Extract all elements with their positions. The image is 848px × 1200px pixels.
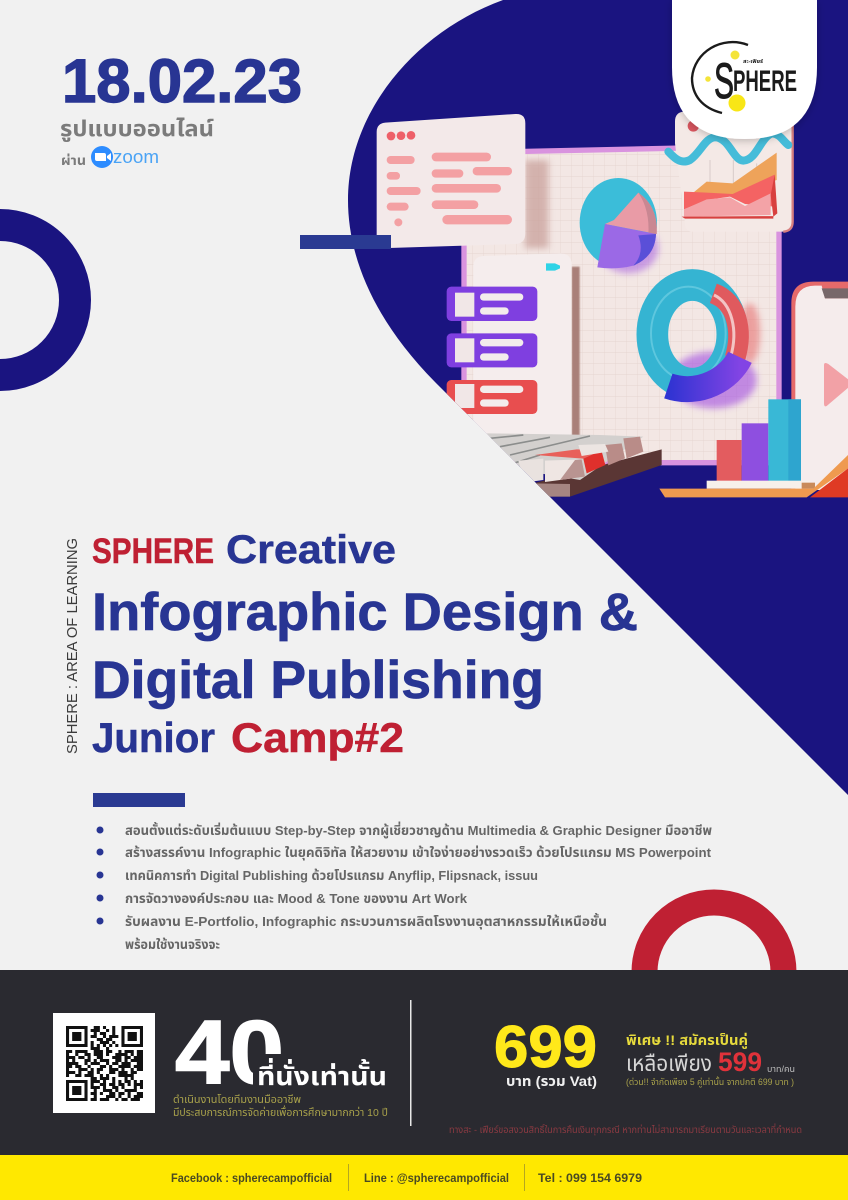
via: ผ่าน xyxy=(61,153,86,168)
footer contacts xyxy=(171,1164,642,1191)
bullet 5: พร้อมใช้งานจริงจะ xyxy=(125,937,220,952)
decorative navy ring xyxy=(0,225,75,375)
price block xyxy=(494,1014,597,1089)
dark info band xyxy=(0,970,848,1155)
pie chart xyxy=(580,178,658,273)
illustration board with grid xyxy=(464,146,779,463)
organiser note: ดำเนินงานโดยทีมงานมืออาชีพ xyxy=(173,1094,301,1106)
icon: zoom logo: zoom xyxy=(113,147,159,167)
facebook: Facebook : spherecampofficial xyxy=(171,1173,332,1185)
laptop base and orange platform xyxy=(659,455,848,497)
special offer block xyxy=(626,1032,795,1088)
title line: Junior Camp#2: Camp#2 xyxy=(231,714,404,761)
side label: SPHERE : AREA OF LEARNING xyxy=(65,538,81,754)
logo badge: สะ-เฟียร์ xyxy=(743,59,763,65)
left phone with list rows xyxy=(447,253,572,437)
seats number: 40 xyxy=(175,1003,284,1103)
bullet 3: เทคนิคการทำ Digital Publishing ด้วยโปรแกรม Anyflip, Flipsnack, issuu xyxy=(125,868,538,883)
title line: SPHERE Creative: SPHERE xyxy=(92,532,214,571)
offer note: (ด่วน!! จำกัดเพียง 5 คู่เท่านั้น จากปกติ 699 บาท ) xyxy=(626,1076,794,1088)
accent bar under title xyxy=(93,793,185,807)
title line: Junior Camp#2: Junior xyxy=(92,714,215,761)
refund note: ทางสะ - เฟียร์ขอสงวนสิทธิ์ในการคืนเงินทุกกรณี หากท่านไม่สามารถมาเรียนตามวันและเวลาที่กำหนด xyxy=(449,1123,802,1136)
bullet list xyxy=(96,821,713,952)
offer heading: พิเศษ !! สมัครเป็นคู่ xyxy=(626,1032,748,1050)
accent bar beside code card xyxy=(300,235,391,249)
offer price: 599 xyxy=(718,1047,762,1077)
date block xyxy=(60,47,302,168)
mini bar chart xyxy=(707,399,815,489)
bullet 5 xyxy=(96,912,607,952)
title line: SPHERE Creative: Creative xyxy=(226,528,396,572)
organiser note: มีประสบการณ์การจัดค่ายเพื่อการศึกษามากกว่า 10 ปี xyxy=(173,1105,388,1119)
offer label: เหลือเพียง xyxy=(626,1051,712,1076)
seats block xyxy=(173,1003,388,1119)
price unit: บาท (รวม Vat) xyxy=(506,1073,597,1089)
title line: Digital Publishing: Digital Publishing xyxy=(92,651,544,710)
date: 18.02.23 xyxy=(62,47,302,115)
line: Line : @spherecampofficial xyxy=(364,1173,509,1185)
area chart card xyxy=(668,112,793,232)
decorative red arc xyxy=(644,902,784,1042)
logo badge: PHERE xyxy=(733,65,797,98)
logo badge xyxy=(672,0,817,139)
title line: Junior Camp#2 xyxy=(92,714,404,761)
telephone: Tel : 099 154 6979 xyxy=(538,1173,642,1185)
title line: Infographic Design &: Infographic Design & xyxy=(92,583,638,642)
logo badge: S xyxy=(714,53,734,109)
offer unit: บาท/คน xyxy=(767,1064,795,1074)
organiser note xyxy=(173,1094,388,1119)
QR code xyxy=(53,1013,155,1113)
vertical divider xyxy=(410,1000,412,1126)
ring chart xyxy=(651,285,760,408)
list row: purple xyxy=(447,287,537,321)
navy background shape xyxy=(348,0,848,795)
bullet 5: รับผลงาน E-Portfolio, Infographic กระบวนการผลิตโรงงานอุตสาหกรรมให้เหนือชั้น xyxy=(125,912,607,929)
code card xyxy=(377,114,525,248)
yellow footer band xyxy=(0,1155,848,1200)
price: 699 xyxy=(494,1014,597,1080)
list row: red xyxy=(447,380,537,414)
right phone with play icon xyxy=(791,282,848,490)
bullet 2: สร้างสรรค์งาน Infographic ในยุคดิจิทัล ให้สวยงาม เข้าใจง่ายอย่างรวดเร็ว ด้วยโปรแกรม MS Powerpoint xyxy=(125,845,712,860)
icon: zoom logo xyxy=(91,146,159,168)
list row: purple xyxy=(447,333,537,367)
seats label: ที่นั่งเท่านั้น xyxy=(257,1058,387,1091)
keyboard xyxy=(487,433,662,497)
illustration: 3D infographic dashboard xyxy=(377,112,848,497)
format: รูปแบบออนไลน์ xyxy=(60,116,214,142)
title line: SPHERE Creative xyxy=(92,528,396,572)
title xyxy=(92,528,638,761)
bullet 4: การจัดวางองค์ประกอบ และ Mood & Tone ของงาน Art Work xyxy=(125,891,468,906)
bullet 1: สอนตั้งแต่ระดับเริ่มต้นแบบ Step-by-Step จากผู้เชี่ยวชาญด้าน Multimedia & Graphic Designer มืออาชีพ xyxy=(125,821,713,839)
